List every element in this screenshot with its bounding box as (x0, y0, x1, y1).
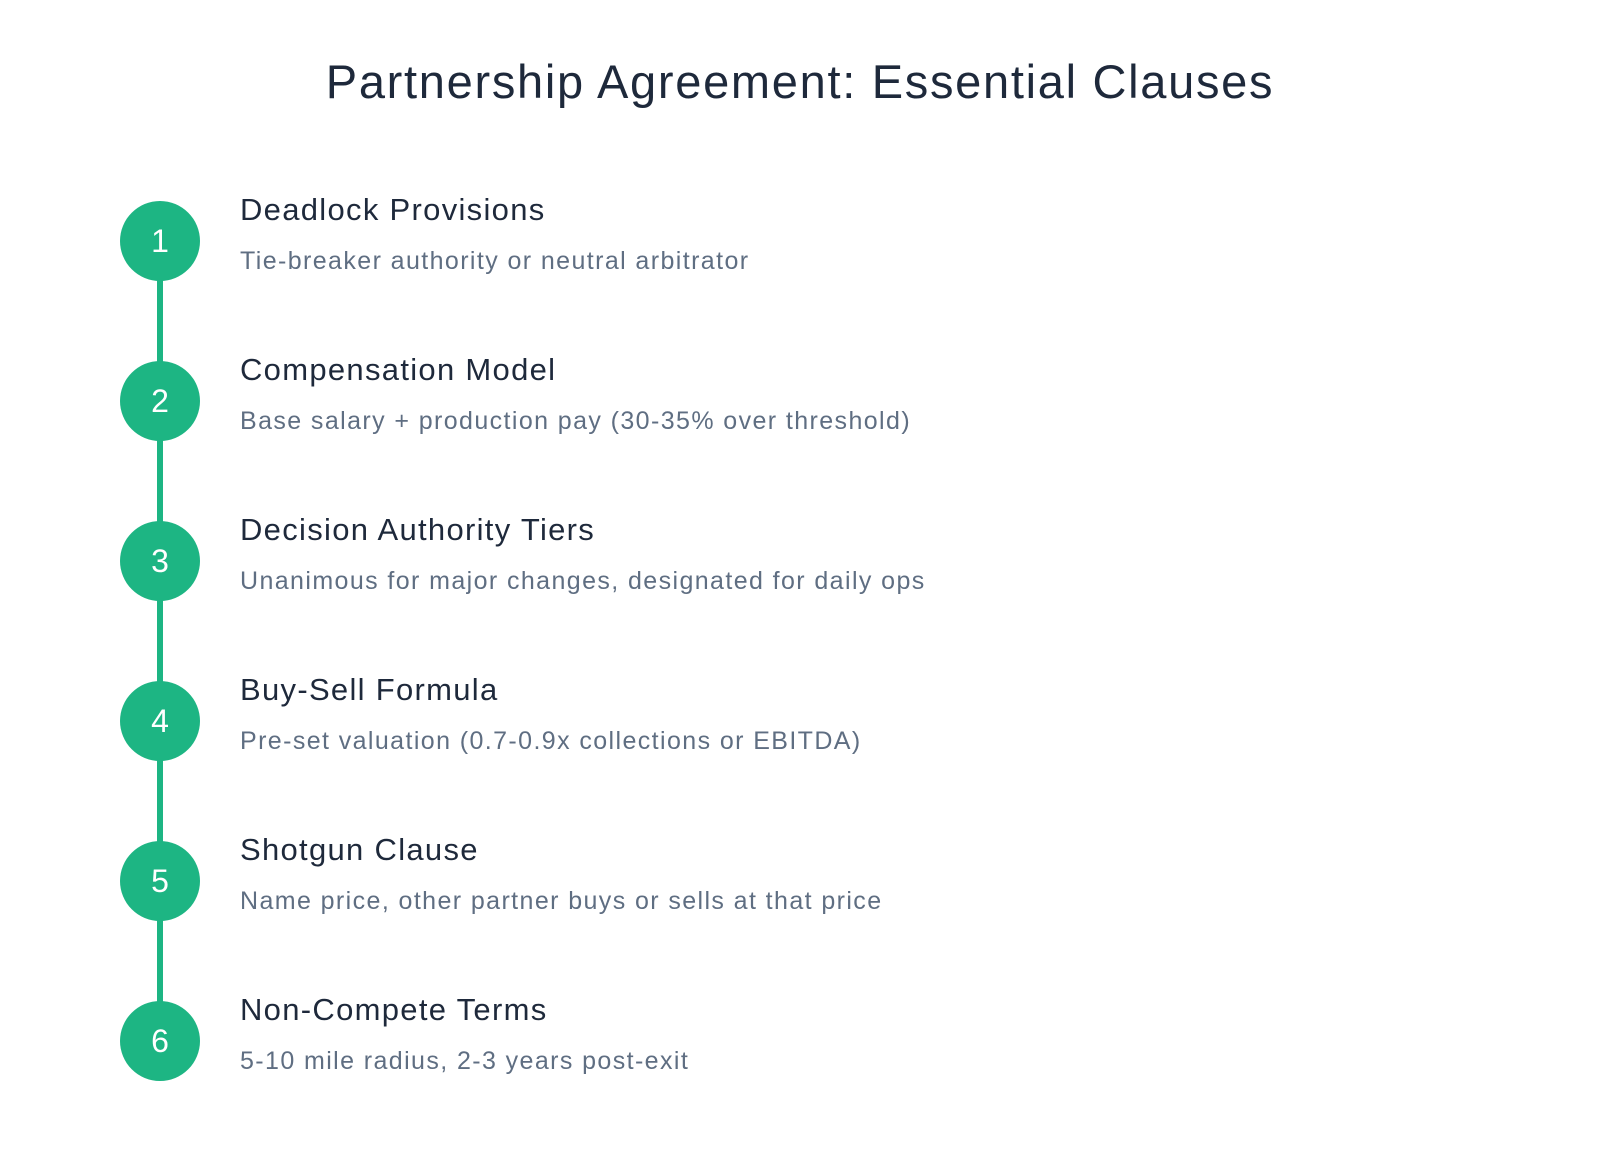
description 3: Unanimous for major changes, designated for daily ops (240, 567, 926, 595)
heading 5: Shotgun Clause (240, 832, 479, 867)
circle 5 (120, 841, 200, 921)
step 6 (120, 992, 689, 1081)
timeline connector line (157, 241, 163, 1041)
description 1: Tie-breaker authority or neutral arbitrator (240, 247, 749, 275)
circle 1 (120, 201, 200, 281)
heading 6: Non-Compete Terms (240, 992, 548, 1027)
step 5 (120, 832, 883, 921)
heading 3: Decision Authority Tiers (240, 512, 595, 547)
circle 4 (120, 681, 200, 761)
step 3 (120, 512, 926, 601)
circle 5: 5 (151, 863, 169, 899)
circle 4: 4 (151, 703, 169, 739)
circle 6: 6 (151, 1023, 169, 1059)
heading 4: Buy-Sell Formula (240, 672, 499, 707)
heading 2: Compensation Model (240, 352, 556, 387)
title: Partnership Agreement: Essential Clauses (326, 55, 1274, 108)
circle 2 (120, 361, 200, 441)
heading 1: Deadlock Provisions (240, 192, 546, 227)
description 5: Name price, other partner buys or sells at that price (240, 887, 883, 915)
circle 6 (120, 1001, 200, 1081)
circle 2: 2 (151, 383, 169, 419)
step 4 (120, 672, 862, 761)
step 1 (120, 192, 749, 281)
description 4: Pre-set valuation (0.7-0.9x collections or EBITDA) (240, 727, 862, 755)
circle 3: 3 (151, 543, 169, 579)
circle 3 (120, 521, 200, 601)
circle 1: 1 (151, 223, 169, 259)
description 2: Base salary + production pay (30-35% over threshold) (240, 407, 911, 435)
step 2 (120, 352, 911, 441)
description 6: 5-10 mile radius, 2-3 years post-exit (240, 1047, 689, 1075)
